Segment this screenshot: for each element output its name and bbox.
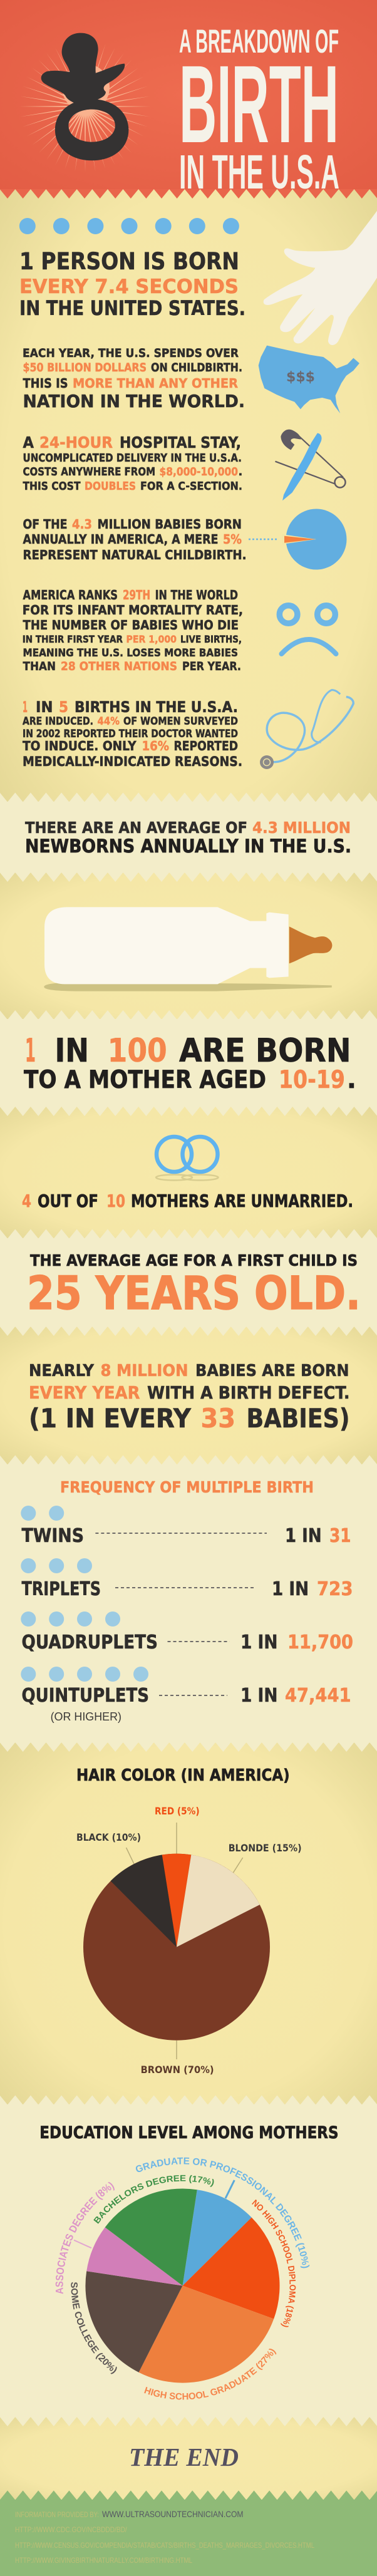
icon: safety pin and scalpel (276, 430, 346, 500)
text: $50 billion spending: $50 BILLION DOLLARS (23, 361, 147, 375)
row: twins: 31 (329, 1525, 351, 1547)
text: newborns annually (25, 819, 351, 857)
text: 1 in 100: ARE BORN (179, 1032, 351, 1070)
text: $50 billion spending: THIS IS (23, 376, 68, 391)
text: 4 out of 10 (22, 1191, 353, 1211)
text: hospital stay cost: COSTS ANYWHERE FROM (23, 465, 155, 478)
row: quintuplets: QUINTUPLETS (21, 1685, 149, 1707)
panel: facts (19, 211, 377, 769)
text: 1 in 100 (24, 1032, 356, 1094)
chart: hair color pie (83, 1854, 270, 2041)
panel: frequency of multiple birth (0, 1456, 377, 1752)
text: induced births: MEDICALLY-INDICATED REASONS. (23, 754, 242, 769)
text: newborns annually: NEWBORNS ANNUALLY IN THE U.S. (25, 835, 351, 857)
labels: education curved text: ASSOCIATES DEGREE (8%) (55, 2182, 115, 2294)
text: one person born every 7.4 seconds (19, 248, 245, 320)
panel: unmarried mothers (22, 1137, 353, 1211)
row: triplets (21, 1558, 353, 1600)
labels: education curved text: SOME COLLEGE (20%) (71, 2282, 117, 2374)
row: triplets: 723 (317, 1578, 353, 1600)
row: twins (21, 1506, 351, 1547)
text: hospital stay cost: UNCOMPLICATED DELIVERY IN THE U.S.A. (23, 452, 242, 465)
text: induced births: 44% (98, 715, 120, 728)
text: $50 billion spending (23, 347, 245, 411)
row: quintuplets: 1 IN (240, 1685, 277, 1707)
text: $50 billion spending: ON CHILDBIRTH. (151, 361, 242, 375)
text: birth defects: NEARLY (29, 1362, 95, 1380)
text: 1 in 100: TO A MOTHER AGED (24, 1066, 266, 1094)
text: infant mortality rank: PER 1,000 (127, 633, 177, 645)
heading: hair color: HAIR COLOR (IN AMERICA) (76, 1766, 290, 1785)
icon: sad face (279, 606, 336, 654)
row: quintuplets: 47,441 (285, 1685, 351, 1707)
text: induced births: IN (36, 698, 53, 716)
text: infant mortality rank: THAN (23, 660, 56, 673)
text: natural childbirth share: REPRESENT NATURAL CHILDBIRTH. (23, 547, 247, 562)
text: one person born every 7.4 seconds: 1 PERSON IS BORN (19, 248, 239, 275)
row: triplets: TRIPLETS (21, 1578, 101, 1600)
text: natural childbirth share: 4.3 (72, 517, 92, 532)
text: natural childbirth share (23, 517, 247, 562)
text: 4 out of 10: 10 (106, 1191, 125, 1211)
text: natural childbirth share: ANNUALLY IN AMERICA, A MERE (23, 532, 218, 547)
pacifier silhouette (41, 33, 128, 160)
text: induced births (23, 698, 242, 769)
heading: the end: THE END (129, 2443, 239, 2471)
text: infant mortality rank: 28 OTHER NATIONS (61, 660, 177, 673)
text: infant mortality rank: LIVE BIRTHS, (180, 633, 242, 645)
labels: hair color: RED (5%) (155, 1805, 200, 1817)
text: 1 in 100: IN (55, 1032, 89, 1070)
text: newborns annually: THERE ARE AN AVERAGE OF (25, 819, 247, 837)
labels: education curved text: GRADUATE OR PROFESSIONAL DEGREE (10%) (135, 2157, 309, 2268)
text: 1 in 100: 10-19 (279, 1066, 345, 1094)
row: triplets: 1 IN (272, 1578, 309, 1600)
labels: hair color: BROWN (70%) (141, 2064, 214, 2076)
text: induced births: IN 2002 REPORTED THEIR DOCTOR WANTED (23, 728, 238, 740)
icon: stethoscope (260, 690, 353, 769)
labels: education curved text: BACHELORS DEGREE (17%) (93, 2175, 214, 2224)
icon: pacifier with sun rays (19, 33, 151, 172)
text: infant mortality rank (23, 587, 243, 673)
text: natural childbirth share: 5% (223, 532, 242, 547)
title (179, 23, 339, 199)
text: infant mortality rank: IN THEIR FIRST YEAR (23, 633, 123, 645)
text: birth defects: (1 IN EVERY (29, 1403, 192, 1434)
icon: baby bottle (44, 907, 332, 991)
labels: education curved text: NO HIGH SCHOOL DIPLOMA (18%) (252, 2200, 296, 2327)
text: hospital stay cost (23, 433, 242, 493)
text: induced births: BIRTHS IN THE U.S.A. (75, 698, 238, 716)
text: hospital stay cost: THIS COST (23, 480, 81, 493)
text: $50 billion spending: MORE THAN ANY OTHER (73, 376, 238, 391)
panel: average age (0, 1229, 377, 1336)
text: sources (15, 2509, 314, 2565)
text: induced births: OF WOMEN SURVEYED (123, 715, 238, 728)
row: quadruplets: 1 IN (240, 1632, 277, 1653)
text: birth defects (29, 1362, 349, 1434)
text: 1 in 100: . (347, 1066, 356, 1094)
heading: frequency: FREQUENCY OF MULTIPLE BIRTH (60, 1478, 314, 1496)
icon: interlocked rings (156, 1137, 218, 1180)
leader lines (127, 1823, 243, 2059)
text: 4 out of 10: 4 (22, 1191, 31, 1211)
row: quadruplets: 11,700 (287, 1632, 353, 1653)
text: infant mortality rank: MEANING THE U.S. LOSES MORE BABIES (23, 647, 238, 660)
icon: baby hand (264, 211, 377, 345)
text: induced births: 5 (59, 698, 68, 716)
labels: hair color: BLONDE (15%) (229, 1842, 302, 1854)
leader lines (74, 2180, 234, 2248)
text: birth defects: BABIES) (247, 1403, 349, 1434)
row: quadruplets (21, 1611, 353, 1653)
row: twins: 1 IN (285, 1525, 322, 1547)
text: hospital stay cost: $8,000-10,000 (159, 465, 238, 478)
text: $50 billion spending: EACH YEAR, THE U.S. SPENDS OVER (23, 347, 239, 360)
text: 4 out of 10: OUT OF (38, 1191, 98, 1211)
text: infant mortality rank: 29TH (123, 587, 150, 603)
text: induced births: REPORTED (174, 738, 238, 753)
labels: education curved text: HIGH SCHOOL GRADUATE (27%) (144, 2349, 277, 2400)
text: birth defects: 8 MILLION (100, 1362, 188, 1380)
row: quadruplets: QUADRUPLETS (21, 1632, 158, 1653)
sun rays (19, 41, 151, 172)
text: birth defects: BABIES ARE BORN (195, 1362, 349, 1380)
text: induced births: 1 (23, 698, 28, 716)
panel: teen mothers (0, 1010, 377, 1116)
text: infant mortality rank: THE NUMBER OF BABIES WHO DIE (23, 618, 239, 633)
text: induced births: TO INDUCE. ONLY (23, 738, 137, 753)
text: 1 in 100: 100 (108, 1032, 167, 1070)
text: hospital stay cost: HOSPITAL STAY, (120, 433, 241, 452)
icon: dotted pointer (249, 539, 277, 540)
icon: USA map with dollar signs (259, 346, 359, 413)
text: birth defects: WITH A BIRTH DEFECT. (147, 1383, 349, 1403)
text: hospital stay cost: DOUBLES (85, 480, 136, 493)
row: twins: TWINS (21, 1525, 84, 1547)
text: hospital stay cost: A (23, 433, 34, 452)
text: sources: INFORMATION PROVIDED BY: (15, 2510, 99, 2519)
text: one person born every 7.4 seconds: IN THE UNITED STATES. (19, 296, 245, 320)
labels: education curved text (55, 2157, 309, 2400)
text: hospital stay cost: 24-HOUR (39, 433, 113, 452)
panel: education level (0, 2096, 377, 2426)
text: birth defects: 33 (200, 1403, 235, 1434)
row: quintuplets (21, 1667, 351, 1723)
text: infant mortality rank: AMERICA RANKS (23, 587, 118, 603)
text: hospital stay cost: FOR A C-SECTION. (140, 480, 242, 493)
text: natural childbirth share: OF THE (23, 517, 68, 532)
labels: hair color (76, 1805, 302, 2076)
chart: education pie (85, 2188, 280, 2383)
labels: hair color: BLACK (10%) (76, 1831, 141, 1843)
text: $50 billion spending: NATION IN THE WORLD. (23, 391, 245, 411)
text: newborns annually: 4.3 MILLION (252, 819, 351, 837)
heading: education: EDUCATION LEVEL AMONG MOTHERS (39, 2123, 339, 2143)
text: induced births: ARE INDUCED. (23, 715, 93, 728)
chart: 5 percent pie (282, 509, 347, 570)
panel: red header (0, 0, 377, 199)
text: 1 in 100: 1 (25, 1032, 36, 1070)
text: sources: HTTP://WWW.GIVINGBIRTHNATURALLY.COM/BIRTHING.HTML (15, 2556, 192, 2565)
text: infant mortality rank: PER YEAR. (182, 660, 241, 673)
panel: green footer sources (0, 2490, 377, 2576)
text: one person born every 7.4 seconds: EVERY 7.4 SECONDS (19, 276, 239, 298)
panel: hair color (76, 1766, 302, 2076)
icon: USA map with dollar signs: $$$ (286, 370, 315, 385)
text: birth defects: EVERY YEAR (29, 1383, 140, 1403)
text: induced births: 16% (142, 738, 169, 753)
text: hospital stay cost: . (238, 465, 242, 478)
text: natural childbirth share: MILLION BABIES BORN (98, 517, 242, 532)
text: infant mortality rank: FOR ITS INFANT MORTALITY RATE, (23, 603, 243, 618)
panel: 4.3 million newborns (0, 793, 377, 882)
text: infant mortality rank: IN THE WORLD (155, 587, 238, 603)
row: quintuplets: (OR HIGHER) (51, 1710, 121, 1723)
text: sources: WWW.ULTRASOUNDTECHNICIAN.COM (102, 2509, 243, 2519)
dots: seven blue seconds (19, 218, 239, 234)
text: sources: HTTP://WWW.CDC.GOV/NCBDDD/BD/ (15, 2525, 127, 2534)
